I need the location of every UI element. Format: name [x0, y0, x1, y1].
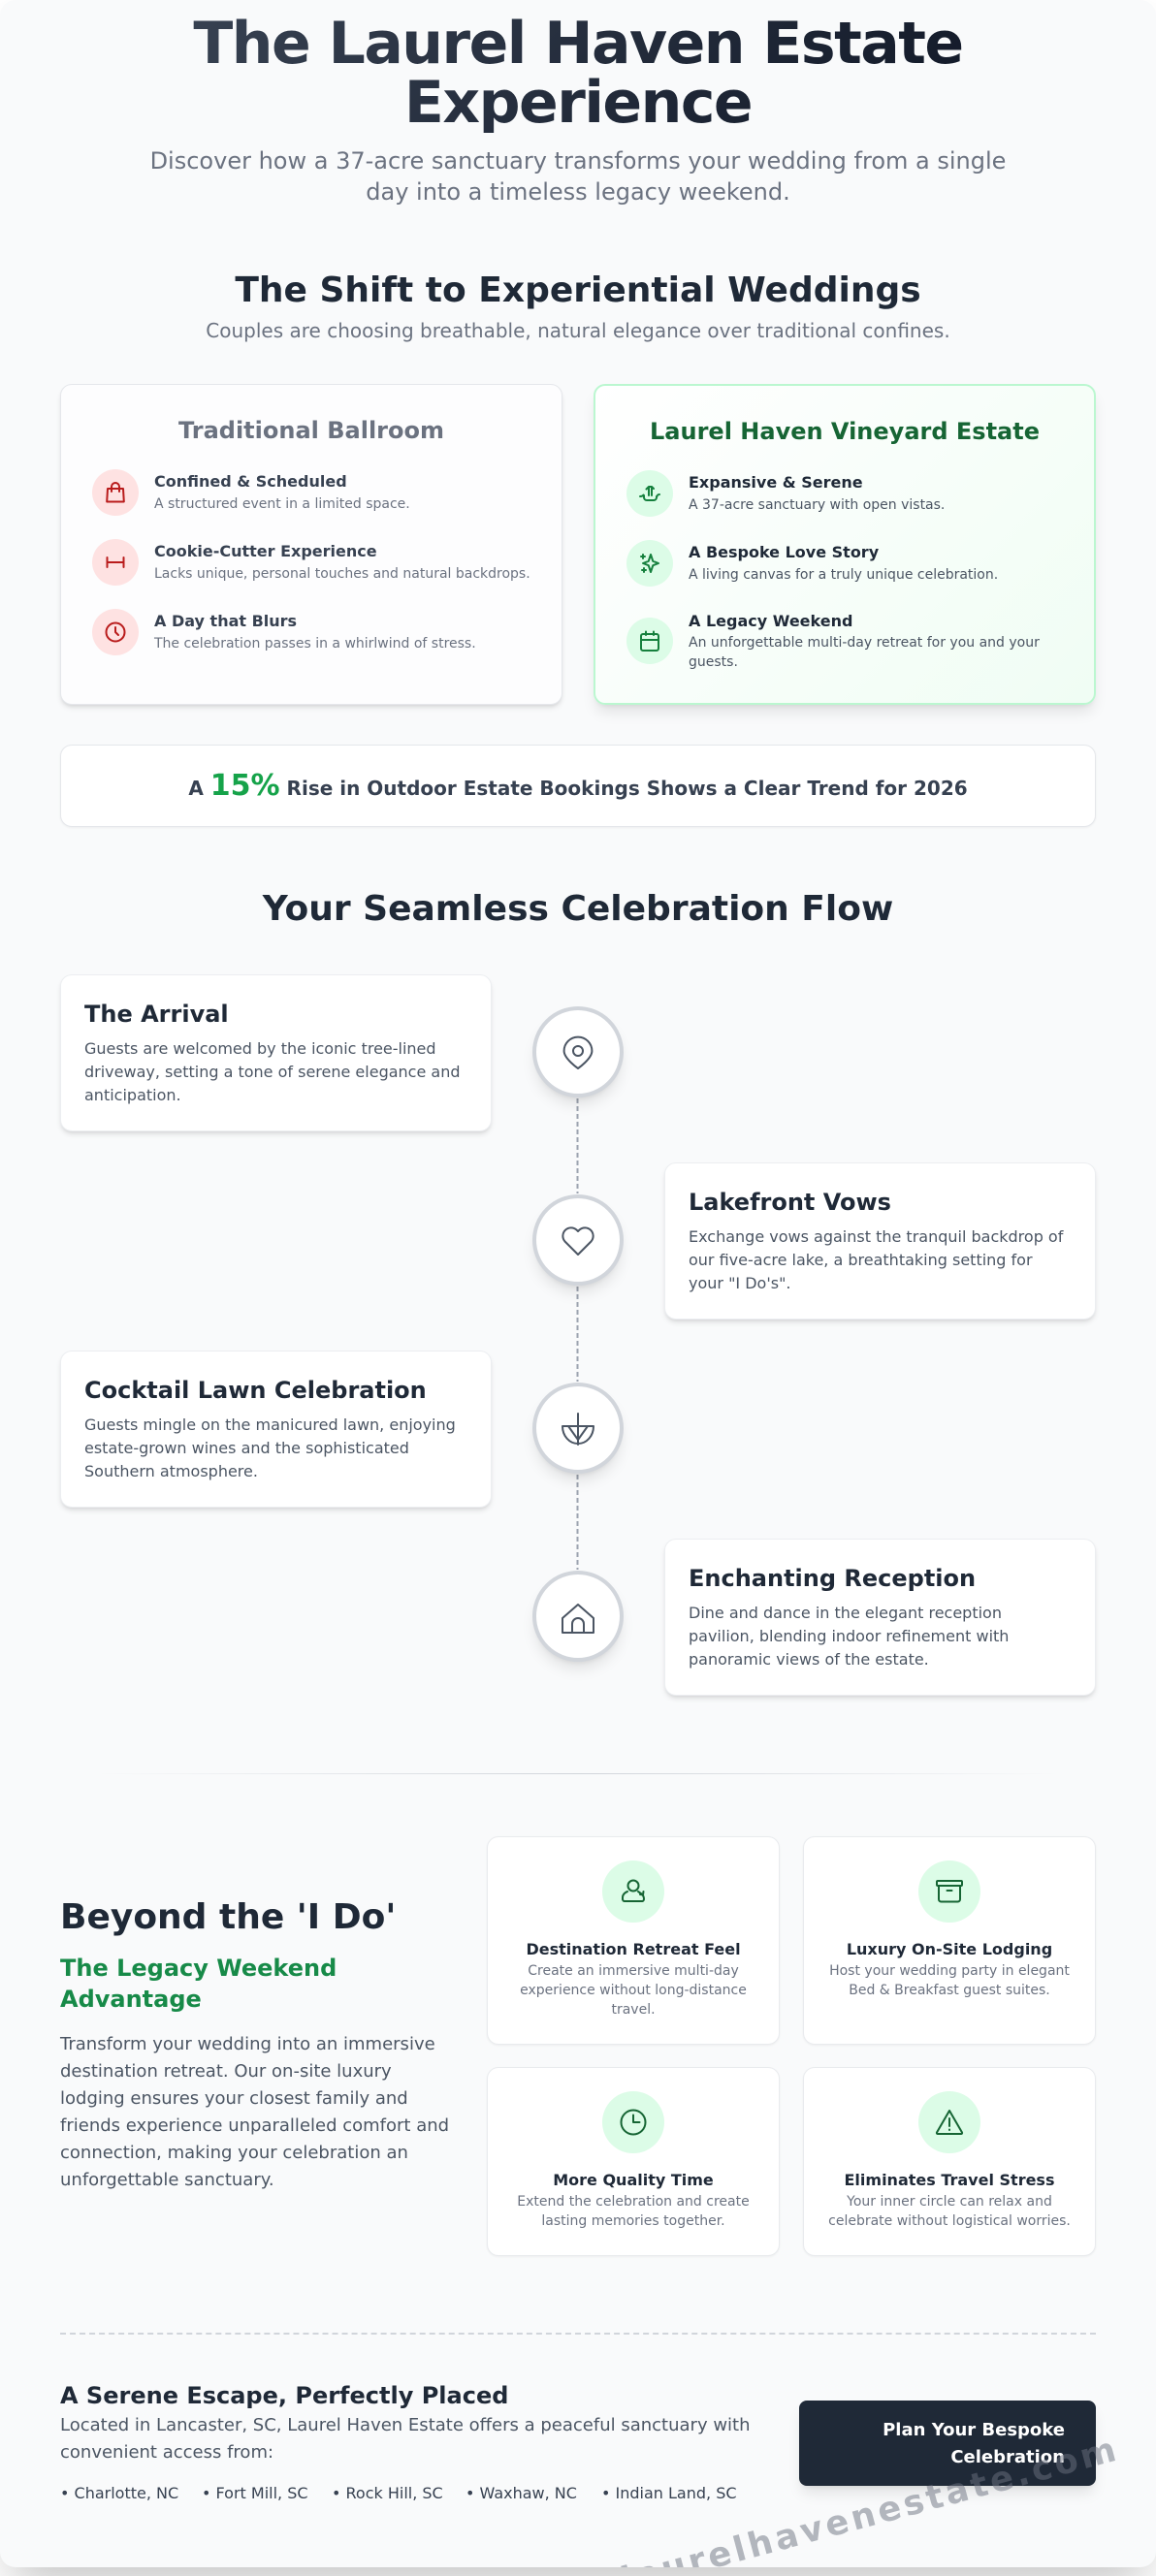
panel heading: Laurel Haven Vineyard Estate — [650, 418, 1040, 445]
list: nearby cities: • Indian Land, SC — [601, 2484, 737, 2502]
icon: tray with arrow — [626, 470, 673, 517]
step card: the arrival: anticipation. — [84, 1086, 181, 1104]
feature card: on-site lodging: Bed & Breakfast guest suites. — [849, 1983, 1050, 1998]
feature card: destination retreat: Destination Retreat Feel — [526, 1940, 741, 1958]
call to action button: Plan Your Bespoke — [883, 2420, 1065, 2440]
step card: cocktail lawn: Cocktail Lawn Celebration — [84, 1377, 427, 1404]
item: legacy weekend: A Legacy Weekend — [689, 612, 852, 630]
feature card: travel stress: celebrate without logistical worries. — [828, 2213, 1071, 2229]
step card: cocktail lawn: Southern atmosphere. — [84, 1462, 258, 1480]
step card: the arrival: Guests are welcomed by the iconic tree-lined — [84, 1039, 436, 1058]
step card: the arrival: driveway, setting a tone of serene elegance and — [84, 1063, 460, 1081]
node icon: heart — [532, 1194, 624, 1286]
text block: location: Located in Lancaster, SC, Laurel Haven Estate offers a peaceful sanctuary with — [60, 2415, 751, 2435]
item: confined — [92, 469, 410, 516]
text block: location — [60, 2415, 751, 2463]
list: nearby cities: • Waxhaw, NC — [466, 2484, 577, 2502]
subtitle — [150, 147, 1006, 206]
item: legacy weekend: guests. — [689, 654, 738, 670]
list: nearby cities: • Rock Hill, SC — [332, 2484, 443, 2502]
item: cookie cutter: Cookie-Cutter Experience — [154, 542, 377, 560]
node icon: wine glass — [532, 1383, 624, 1474]
step card: lakefront vows: Exchange vows against the tranquil backdrop of — [689, 1227, 1063, 1246]
title: The Laurel Haven Estate — [193, 10, 963, 78]
panel: laurel haven vineyard estate — [594, 384, 1096, 705]
item: confined: A structured event in a limited space. — [154, 496, 410, 512]
step card: enchanting reception: Enchanting Reception — [689, 1565, 976, 1592]
subheading: legacy weekend advantage: The Legacy Weekend — [60, 1955, 337, 1982]
list: nearby cities — [60, 2484, 737, 2502]
item: expansive — [626, 470, 945, 517]
item: legacy weekend — [626, 612, 1040, 670]
step card: cocktail lawn: estate-grown wines and the sophisticated — [84, 1439, 409, 1457]
step card: lakefront vows: Lakefront Vows — [689, 1189, 891, 1216]
stat banner — [60, 745, 1096, 827]
feature card: destination retreat: experience without long-distance — [520, 1983, 747, 1998]
feature card: on-site lodging — [803, 1836, 1096, 2045]
node icon: location pin — [532, 1006, 624, 1097]
feature card: travel stress: Eliminates Travel Stress — [844, 2171, 1054, 2189]
call to action button: Celebration — [950, 2447, 1065, 2467]
list: nearby cities: • Fort Mill, SC — [202, 2484, 308, 2502]
list: nearby cities: • Charlotte, NC — [60, 2484, 178, 2502]
feature card: destination retreat: Create an immersive multi-day — [528, 1963, 739, 1979]
title: Experience — [404, 69, 752, 137]
item: cookie cutter: Lacks unique, personal touches and natural backdrops. — [154, 566, 530, 582]
node icon: home — [532, 1571, 624, 1662]
subheading: legacy weekend advantage: Advantage — [60, 1986, 202, 2013]
heading: serene escape: A Serene Escape, Perfectly Placed — [60, 2382, 508, 2409]
feature card: quality time: Extend the celebration and create — [517, 2194, 750, 2210]
panel heading: Traditional Ballroom — [178, 417, 444, 444]
feature card: travel stress: Your inner circle can relax and — [847, 2194, 1052, 2210]
item: bespoke: A Bespoke Love Story — [689, 543, 879, 561]
feature card: on-site lodging: Luxury On-Site Lodging — [847, 1940, 1052, 1958]
step card: lakefront vows: our five-acre lake, a breathtaking setting for — [689, 1251, 1033, 1269]
footer divider — [60, 2333, 1096, 2335]
step card: cocktail lawn: Guests mingle on the manicured lawn, enjoying — [84, 1415, 456, 1434]
call to action button — [799, 2401, 1096, 2486]
stat text: A 15% Rise in Outdoor Estate Bookings Shows a Clear Trend for 2026 — [188, 769, 968, 803]
feature card: quality time — [487, 2067, 780, 2256]
step card: enchanting reception: panoramic views of the estate. — [689, 1650, 929, 1669]
text block: legacy description: lodging ensures your closest family and — [60, 2088, 408, 2109]
section divider — [97, 1773, 1059, 1774]
item: day blurs — [92, 609, 476, 655]
feature card: quality time: More Quality Time — [553, 2171, 714, 2189]
text block: legacy description: unforgettable sanctuary. — [60, 2170, 274, 2190]
icon: sparkles — [626, 540, 673, 587]
text block: legacy description — [60, 2034, 449, 2190]
icon: archive box — [918, 1860, 980, 1923]
item: day blurs: The celebration passes in a whirlwind of stress. — [154, 636, 476, 652]
icon: calendar — [626, 618, 673, 664]
feature card: destination retreat — [487, 1836, 780, 2045]
step card: lakefront vows — [664, 1162, 1096, 1320]
item: confined: Confined & Scheduled — [154, 472, 347, 491]
icon: clock — [92, 609, 139, 655]
feature card: on-site lodging: Host your wedding party in elegant — [829, 1963, 1070, 1979]
timeline connector — [576, 1098, 578, 1570]
text block: legacy description: connection, making your celebration an — [60, 2143, 408, 2163]
icon: shopping bag — [92, 469, 139, 516]
feature card: quality time: lasting memories together. — [541, 2213, 725, 2229]
feature card: travel stress — [803, 2067, 1096, 2256]
step card: enchanting reception: Dine and dance in the elegant reception — [689, 1604, 1002, 1622]
heading: beyond the i do: Beyond the 'I Do' — [60, 1897, 396, 1937]
subtitle: day into a timeless legacy weekend. — [366, 178, 790, 206]
step card: the arrival: The Arrival — [84, 1001, 229, 1028]
icon: warning triangle — [918, 2091, 980, 2153]
item: cookie cutter — [92, 539, 530, 586]
step card: enchanting reception — [664, 1539, 1096, 1696]
item: day blurs: A Day that Blurs — [154, 612, 297, 630]
title — [190, 15, 966, 133]
subheading: legacy weekend advantage — [60, 1955, 337, 2013]
step card: lakefront vows: your "I Do's". — [689, 1274, 791, 1292]
text block: legacy description: friends experience unparalleled comfort and — [60, 2115, 449, 2136]
heading: celebration flow: Your Seamless Celebration Flow — [263, 889, 893, 929]
panel: traditional ballroom — [60, 384, 562, 705]
item: bespoke — [626, 540, 998, 587]
text block: legacy description: Transform your wedding into an immersive — [60, 2034, 435, 2054]
item: legacy weekend: An unforgettable multi-day retreat for you and your — [689, 635, 1040, 651]
step card: enchanting reception: pavilion, blending indoor refinement with — [689, 1627, 1009, 1645]
item: bespoke: A living canvas for a truly unique celebration. — [689, 567, 998, 583]
text block: legacy description: destination retreat. Our on-site luxury — [60, 2061, 392, 2082]
item: expansive: Expansive & Serene — [689, 473, 863, 492]
icon: person with cloud — [602, 1860, 664, 1923]
subtitle: Discover how a 37-acre sanctuary transforms your wedding from a single — [150, 147, 1006, 175]
item: expansive: A 37-acre sanctuary with open vistas. — [689, 497, 945, 513]
section subheading: Couples are choosing breathable, natural elegance over traditional confines. — [206, 319, 950, 342]
step card: the arrival — [60, 974, 492, 1131]
feature card: destination retreat: travel. — [611, 2002, 656, 2018]
heading: the shift: The Shift to Experiential Weddings — [235, 270, 921, 310]
step card: cocktail lawn — [60, 1351, 492, 1508]
text block: location: convenient access from: — [60, 2442, 273, 2463]
icon: clock — [602, 2091, 664, 2153]
icon: width bar — [92, 539, 139, 586]
